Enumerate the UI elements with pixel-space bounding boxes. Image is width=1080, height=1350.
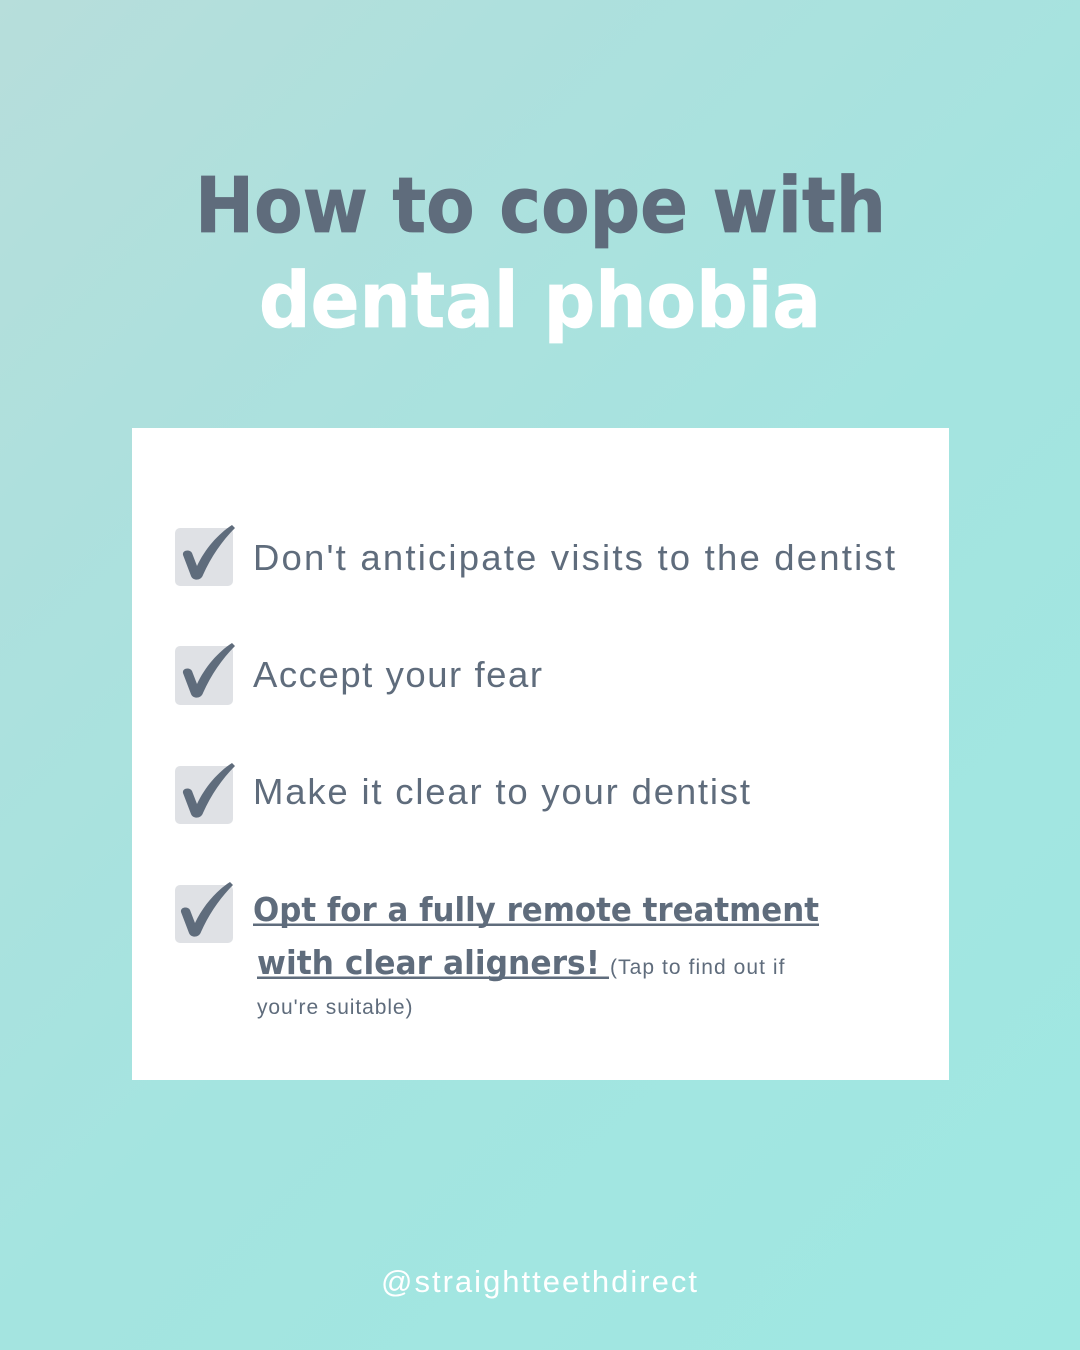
item 4 bold link line 2: with clear aligners! [257,943,600,982]
checklist item 3 [175,763,750,824]
checklist item 2 [175,643,542,705]
title line 2: dental phobia [259,257,821,346]
title [195,162,886,346]
item 1 text: Don't anticipate visits to the dentist [253,537,895,578]
panel: checklist [132,428,949,1080]
icon: checkbox 3 [175,763,235,824]
icon: checkbox 2 [175,643,235,705]
icon: checkbox 1 [175,525,235,586]
title line 1: How to cope with [195,162,886,251]
item 4 note: you're suitable) [257,996,412,1019]
panel background [132,428,949,1080]
checklist item 4 [175,882,819,1019]
footer handle: @straightteethdirect [381,1264,697,1299]
icon: checkbox 4 [175,882,233,943]
item 3 text: Make it clear to your dentist [253,771,750,812]
item 4 bold link line 1: Opt for a fully remote treatment [253,890,819,929]
checklist item 1 [175,525,895,586]
item 4 note [257,956,785,1019]
item 2 text: Accept your fear [253,654,542,695]
item 4 note: (Tap to find out if [610,956,785,979]
